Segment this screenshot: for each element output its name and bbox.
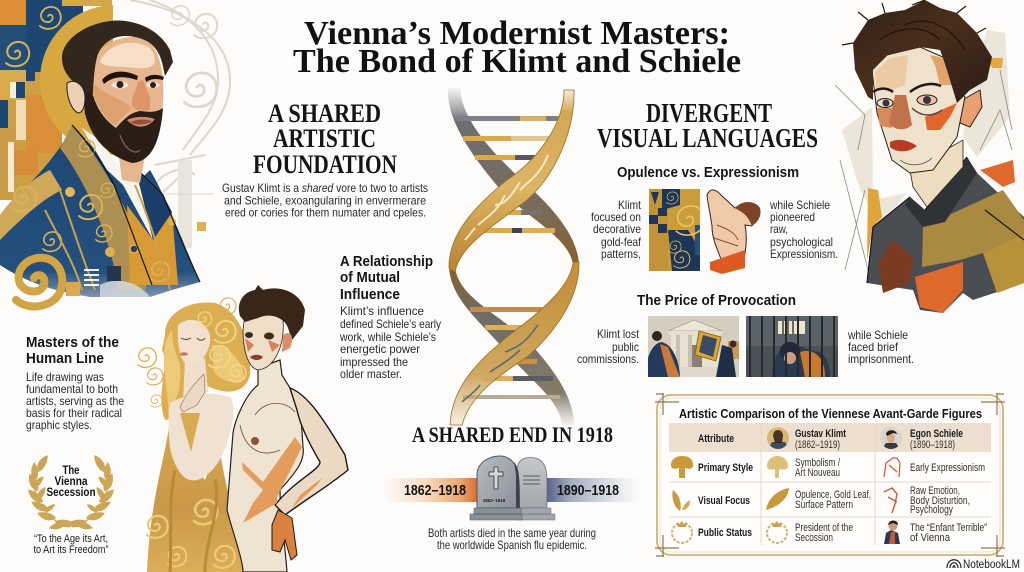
text: Klimt lost commissions (577, 327, 640, 366)
decorative grey line ornament (130, 0, 230, 248)
heading: A Shared Artistic Foundation: ARTISTIC (273, 124, 376, 153)
heading (340, 254, 433, 303)
icon: tombstones (470, 456, 555, 520)
text: shared foundation body: ered or cories for them numater and cpeles. (225, 206, 426, 220)
comparison table (655, 393, 1005, 557)
text: Klimt lost commissions: Klimt lost (597, 327, 640, 341)
bar: Schiele dates: 1890–1918 (557, 482, 619, 499)
illustration: woman and Schiele figures (138, 285, 348, 572)
title (293, 15, 741, 80)
text: Schiele expressionism: Expressionism. (770, 247, 838, 261)
body: energetic power (340, 342, 420, 356)
subheading: Opulence vs. Expressionism (617, 165, 799, 181)
body (26, 370, 124, 432)
heading: A Relationship (340, 254, 433, 270)
text: Klimt decorative: patterns, (601, 247, 641, 261)
laurel wreath (25, 453, 117, 532)
row: Primary Style: Symbolism / (795, 457, 841, 469)
text: Klimt decorative: decorative (593, 222, 641, 236)
portrait: Egon Schiele (835, 0, 1024, 313)
row: Public Status: President of the (795, 522, 853, 534)
header row: Attribute (698, 433, 734, 445)
row: Visual Focus: Raw Emotion, (910, 485, 960, 497)
heading: Human Line (26, 350, 104, 367)
heading: Divergent Visual Languages: DIVERGENT (646, 98, 772, 128)
row: Primary Style (671, 456, 985, 479)
text: Schiele imprisonment: faced brief (848, 340, 899, 354)
painterly background (835, 30, 1015, 270)
heading: A Shared Artistic Foundation: FOUNDATION (253, 150, 397, 179)
text: Schiele imprisonment: imprisonment. (848, 352, 914, 366)
heading: A Shared End in 1918: A SHARED END IN 1918 (412, 422, 613, 447)
table grid lines (669, 423, 991, 545)
heading: Divergent Visual Languages: VISUAL LANGUAGES (597, 123, 818, 153)
front gold strands (449, 90, 579, 425)
timeline bars and tombstones (383, 456, 640, 520)
image: museum and removed painting (648, 316, 739, 377)
heading (26, 334, 119, 367)
body: artists, serving as the (26, 394, 124, 408)
hair (842, 0, 992, 103)
text: Schiele expressionism: while Schiele (769, 198, 830, 212)
body: fundamental to both (26, 382, 118, 396)
header row: (1862–1919) (795, 439, 840, 451)
text: Klimt decorative: Klimt (618, 198, 642, 212)
gold square accent (197, 222, 206, 231)
text: Masters of the Human Line (26, 334, 124, 432)
portrait: Gustav Klimt (0, 0, 230, 306)
jacket (867, 157, 1024, 313)
image: prison cell (746, 316, 838, 377)
text: A Relationship of Mutual Influence (339, 254, 441, 381)
row: Public Status (672, 520, 987, 544)
header row: Gustav Klimt (795, 428, 846, 440)
text: Schiele imprisonment: while Schiele (847, 328, 908, 342)
row: Visual Focus: Opulence, Gold Leaf, (795, 489, 871, 501)
text: Klimt lost commissions: commissions. (577, 352, 639, 366)
row: Visual Focus: Visual Focus (698, 495, 750, 507)
quote: to Art its Freedom” (34, 544, 109, 556)
text: shared foundation body: and Schiele, exoangularing in envermerare (224, 194, 426, 208)
title: The Bond of Klimt and Schiele (293, 43, 741, 80)
bar: Klimt dates (383, 478, 477, 502)
image: Schiele contorted figure (707, 190, 761, 274)
body (339, 304, 441, 381)
body: defined Schiele’s early (340, 317, 441, 331)
body: impressed the (340, 355, 408, 369)
body: Life drawing was (26, 370, 104, 384)
badge label: Vienna (54, 476, 88, 488)
text: shared end caption (428, 526, 596, 552)
row: Visual Focus: Surface Pattern (795, 499, 853, 511)
row: Public Status: Secossion (795, 532, 833, 544)
text: shared end caption: the worldwide Spanish flu epidemic. (437, 538, 587, 552)
row: Primary Style: Early Expressionism (910, 462, 985, 474)
quote: “To the Age its Art, (34, 533, 108, 545)
heading: Masters of the (26, 334, 119, 351)
row: Public Status: of Vienna (910, 532, 951, 544)
text: Schiele imprisonment (847, 328, 914, 366)
badge label: Secession (46, 487, 96, 499)
face (872, 47, 982, 173)
Schiele nude figure (227, 285, 348, 572)
header row: (1890–1918) (910, 439, 955, 451)
heading: Influence (340, 287, 400, 303)
head (62, 21, 173, 183)
heading: Divergent Visual Languages (597, 98, 818, 153)
header row (669, 423, 991, 452)
rungs (458, 116, 563, 399)
bar: Klimt dates: 1862–1918 (404, 482, 466, 499)
text: Schiele expressionism: psychological (770, 235, 833, 249)
heading: A Shared Artistic Foundation (253, 99, 397, 179)
DNA double helix (448, 88, 579, 425)
body: graphic styles. (26, 418, 92, 432)
heading: of Mutual (340, 270, 400, 286)
row: Primary Style: Primary Style (698, 462, 753, 474)
text: Klimt decorative: gold-feaf (601, 235, 642, 249)
table title: Artistic Comparison of the Viennese Avant-Garde Figures (679, 406, 982, 421)
text: shared foundation body: Gustav Klimt is a shared vore to two to artists (222, 181, 428, 195)
subheading: The Price of Provocation (637, 293, 796, 309)
neck (910, 140, 963, 207)
bar: Schiele dates (547, 478, 640, 502)
text: Klimt decorative: focused on (591, 210, 641, 224)
icon: tombstones: 1862–1918 (483, 498, 506, 503)
gold spiral emblem (16, 258, 121, 306)
row: Visual Focus: Psychology (910, 504, 953, 516)
header row: Egon Schiele (910, 428, 963, 440)
mosaic backdrop (0, 0, 112, 200)
row: Public Status: The “Enfant Terrible” (910, 522, 987, 534)
woman in gold dress (138, 298, 250, 572)
title: Vienna’s Modernist Masters: (304, 15, 730, 52)
heading: A Shared Artistic Foundation: A SHARED (268, 99, 381, 128)
image: gold leaf pattern (649, 189, 704, 271)
row: Public Status: Public Status (698, 527, 752, 539)
section: The Price of Provocation (577, 293, 914, 377)
row: Visual Focus (672, 485, 970, 516)
text: Klimt lost commissions: public (612, 340, 639, 354)
body: basis for their radical (26, 406, 122, 420)
badge: The Vienna Secession wreath (25, 453, 117, 532)
gold halo (40, 5, 113, 155)
badge label (46, 465, 96, 499)
text: Schiele expressionism (769, 198, 838, 261)
robe (0, 125, 200, 297)
row: Visual Focus: Body Disturtion, (910, 495, 970, 507)
section: Opulence vs. Expressionism (591, 165, 838, 274)
back strands (448, 88, 579, 425)
text: Klimt decorative (591, 198, 642, 261)
text: shared foundation body (222, 181, 428, 220)
text: Schiele expressionism: pioneered (770, 210, 815, 224)
body: Klimt’s influence (340, 304, 424, 318)
table frame (655, 393, 1005, 557)
text: Schiele expressionism: raw, (770, 222, 788, 236)
quote (34, 533, 109, 556)
row: Primary Style: Art Nouveau (795, 467, 840, 479)
text: shared end caption: Both artists died in the same year during (428, 526, 596, 540)
badge label: The (62, 465, 80, 477)
body: older master. (340, 367, 402, 381)
body: work, while Schiele’s (339, 330, 436, 344)
